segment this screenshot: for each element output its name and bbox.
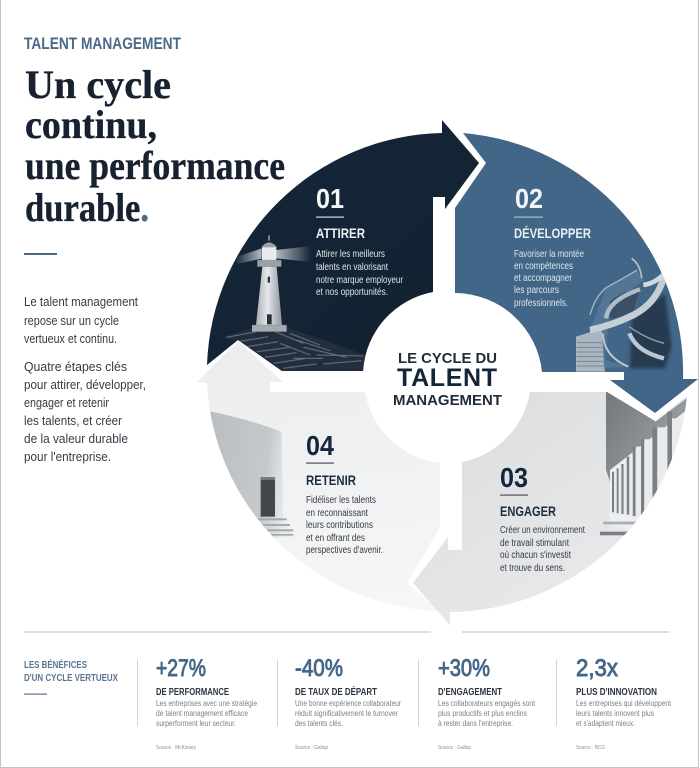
intro text: engager et retenir [24,395,110,410]
panel: 03 engager [413,392,687,625]
benefit: depart: Source : Gallup [295,745,328,751]
number 02: 02 [515,183,543,214]
benefit: performance: Les entreprises avec une stratégie [156,699,257,708]
text 04: en reconnaissant [306,508,368,519]
image: spiral staircase [576,258,672,372]
text 01: talents en valorisant [316,262,388,273]
text 02: en compétences [514,261,573,272]
text 01: et nos opportunités. [316,287,388,298]
benefit: innovation: PLUS D'INNOVATION [576,686,657,698]
benefits heading: LES BÉNÉFICES [24,658,87,671]
heading engager: ENGAGER [500,503,556,519]
text 02 [514,249,584,309]
title [25,62,285,230]
image: colonnade [600,392,687,540]
text 02: les parcours [514,285,559,296]
text 03 [500,525,585,574]
intro text: repose sur un cycle [24,313,119,328]
text 04: perspectives d'avenir. [306,545,383,556]
intro text: Quatre étapes clés [24,359,127,374]
benefit: performance: de talent management efficace [156,709,248,718]
benefit: performance: surperforment leur secteur. [156,719,236,728]
text 03: Créer un environnement [500,525,585,536]
text 04: leurs contributions [306,520,373,531]
benefit: engagement [418,655,536,751]
benefit: innovation: Source : BCG [576,745,605,751]
bottom separator [24,631,669,633]
benefit: innovation: Les entreprises qui développent [576,699,672,708]
panel: 02 developper [455,133,698,413]
benefit: performance [137,655,257,751]
text 02: professionnels. [514,298,568,309]
text 01: notre marque employeur [316,275,404,286]
title: une performance [25,143,285,188]
intro text: Le talent management [24,294,138,309]
image: concrete wall [210,412,294,538]
benefit: depart: des talents clés. [295,719,343,728]
benefit: performance: Source : McKinsey [156,745,196,751]
intro text: vertueux et continu. [24,331,117,346]
number 04: 04 [306,430,334,461]
benefit: depart: Une bonne expérience collaborateur [295,699,401,708]
benefit: depart: réduit significativement le turnover [295,709,398,718]
title rule [24,253,57,255]
benefit: engagement: +30% [438,655,490,682]
intro text: de la valeur durable [24,431,128,446]
benefit: depart: DE TAUX DE DÉPART [295,685,377,698]
center label: TALENT [397,364,497,392]
benefit: engagement: Source : Gallup [438,745,471,751]
text 03: où chacun s'investit [500,550,571,561]
text 03: de travail stimulant [500,538,569,549]
benefit: depart: -40% [295,655,343,682]
intro text [24,294,146,464]
panel: 01 attirer [207,120,479,372]
intro text: les talents, et créer [24,413,123,428]
benefit: performance: DE PERFORMANCE [156,686,229,698]
text 01 [316,249,404,298]
cycle diagram [197,120,698,625]
text 04 [306,495,383,556]
benefit: innovation: 2,3x [576,655,618,682]
benefit: engagement: à rester dans l'entreprise. [438,719,513,728]
center label: MANAGEMENT [393,392,502,409]
heading attirer: ATTIRER [316,225,365,241]
text 04: Fidéliser les talents [306,495,376,506]
number 03: 03 [500,462,528,493]
benefits heading [24,658,118,695]
benefit: depart [277,655,401,751]
text 02: Favoriser la montée [514,249,584,260]
benefits heading: D'UN CYCLE VERTUEUX [24,672,118,684]
intro text: pour attirer, développer, [24,377,146,392]
text 01: Attirer les meilleurs [316,249,385,260]
intro text: pour l'entreprise. [24,449,111,464]
benefit: performance: +27% [156,655,206,682]
number 01: 01 [316,183,344,214]
benefit: engagement: Les collaborateurs engagés sont [438,699,536,708]
heading developper: DÉVELOPPER [514,225,591,241]
header eyebrow: TALENT MANAGEMENT [24,34,181,53]
text 04: et en offrant des [306,533,365,544]
text 02: et accompagner [514,273,573,284]
heading retenir: RETENIR [306,472,356,488]
panel: 04 retenir [197,341,440,611]
benefit: innovation: et s'adaptent mieux. [576,719,635,728]
benefit: engagement: D'ENGAGEMENT [438,686,502,698]
title: continu, [25,102,157,147]
title: durable. [25,185,149,230]
benefit: innovation: leurs talents innovent plus [576,709,654,718]
benefit: engagement: plus productifs et plus enclins [438,709,527,718]
center label: LE CYCLE DU [398,350,497,367]
center label [393,350,502,409]
text 03: et trouve du sens. [500,563,565,574]
image: lighthouse [222,235,365,372]
benefit: innovation [556,655,672,751]
title: Un cycle [25,62,171,107]
